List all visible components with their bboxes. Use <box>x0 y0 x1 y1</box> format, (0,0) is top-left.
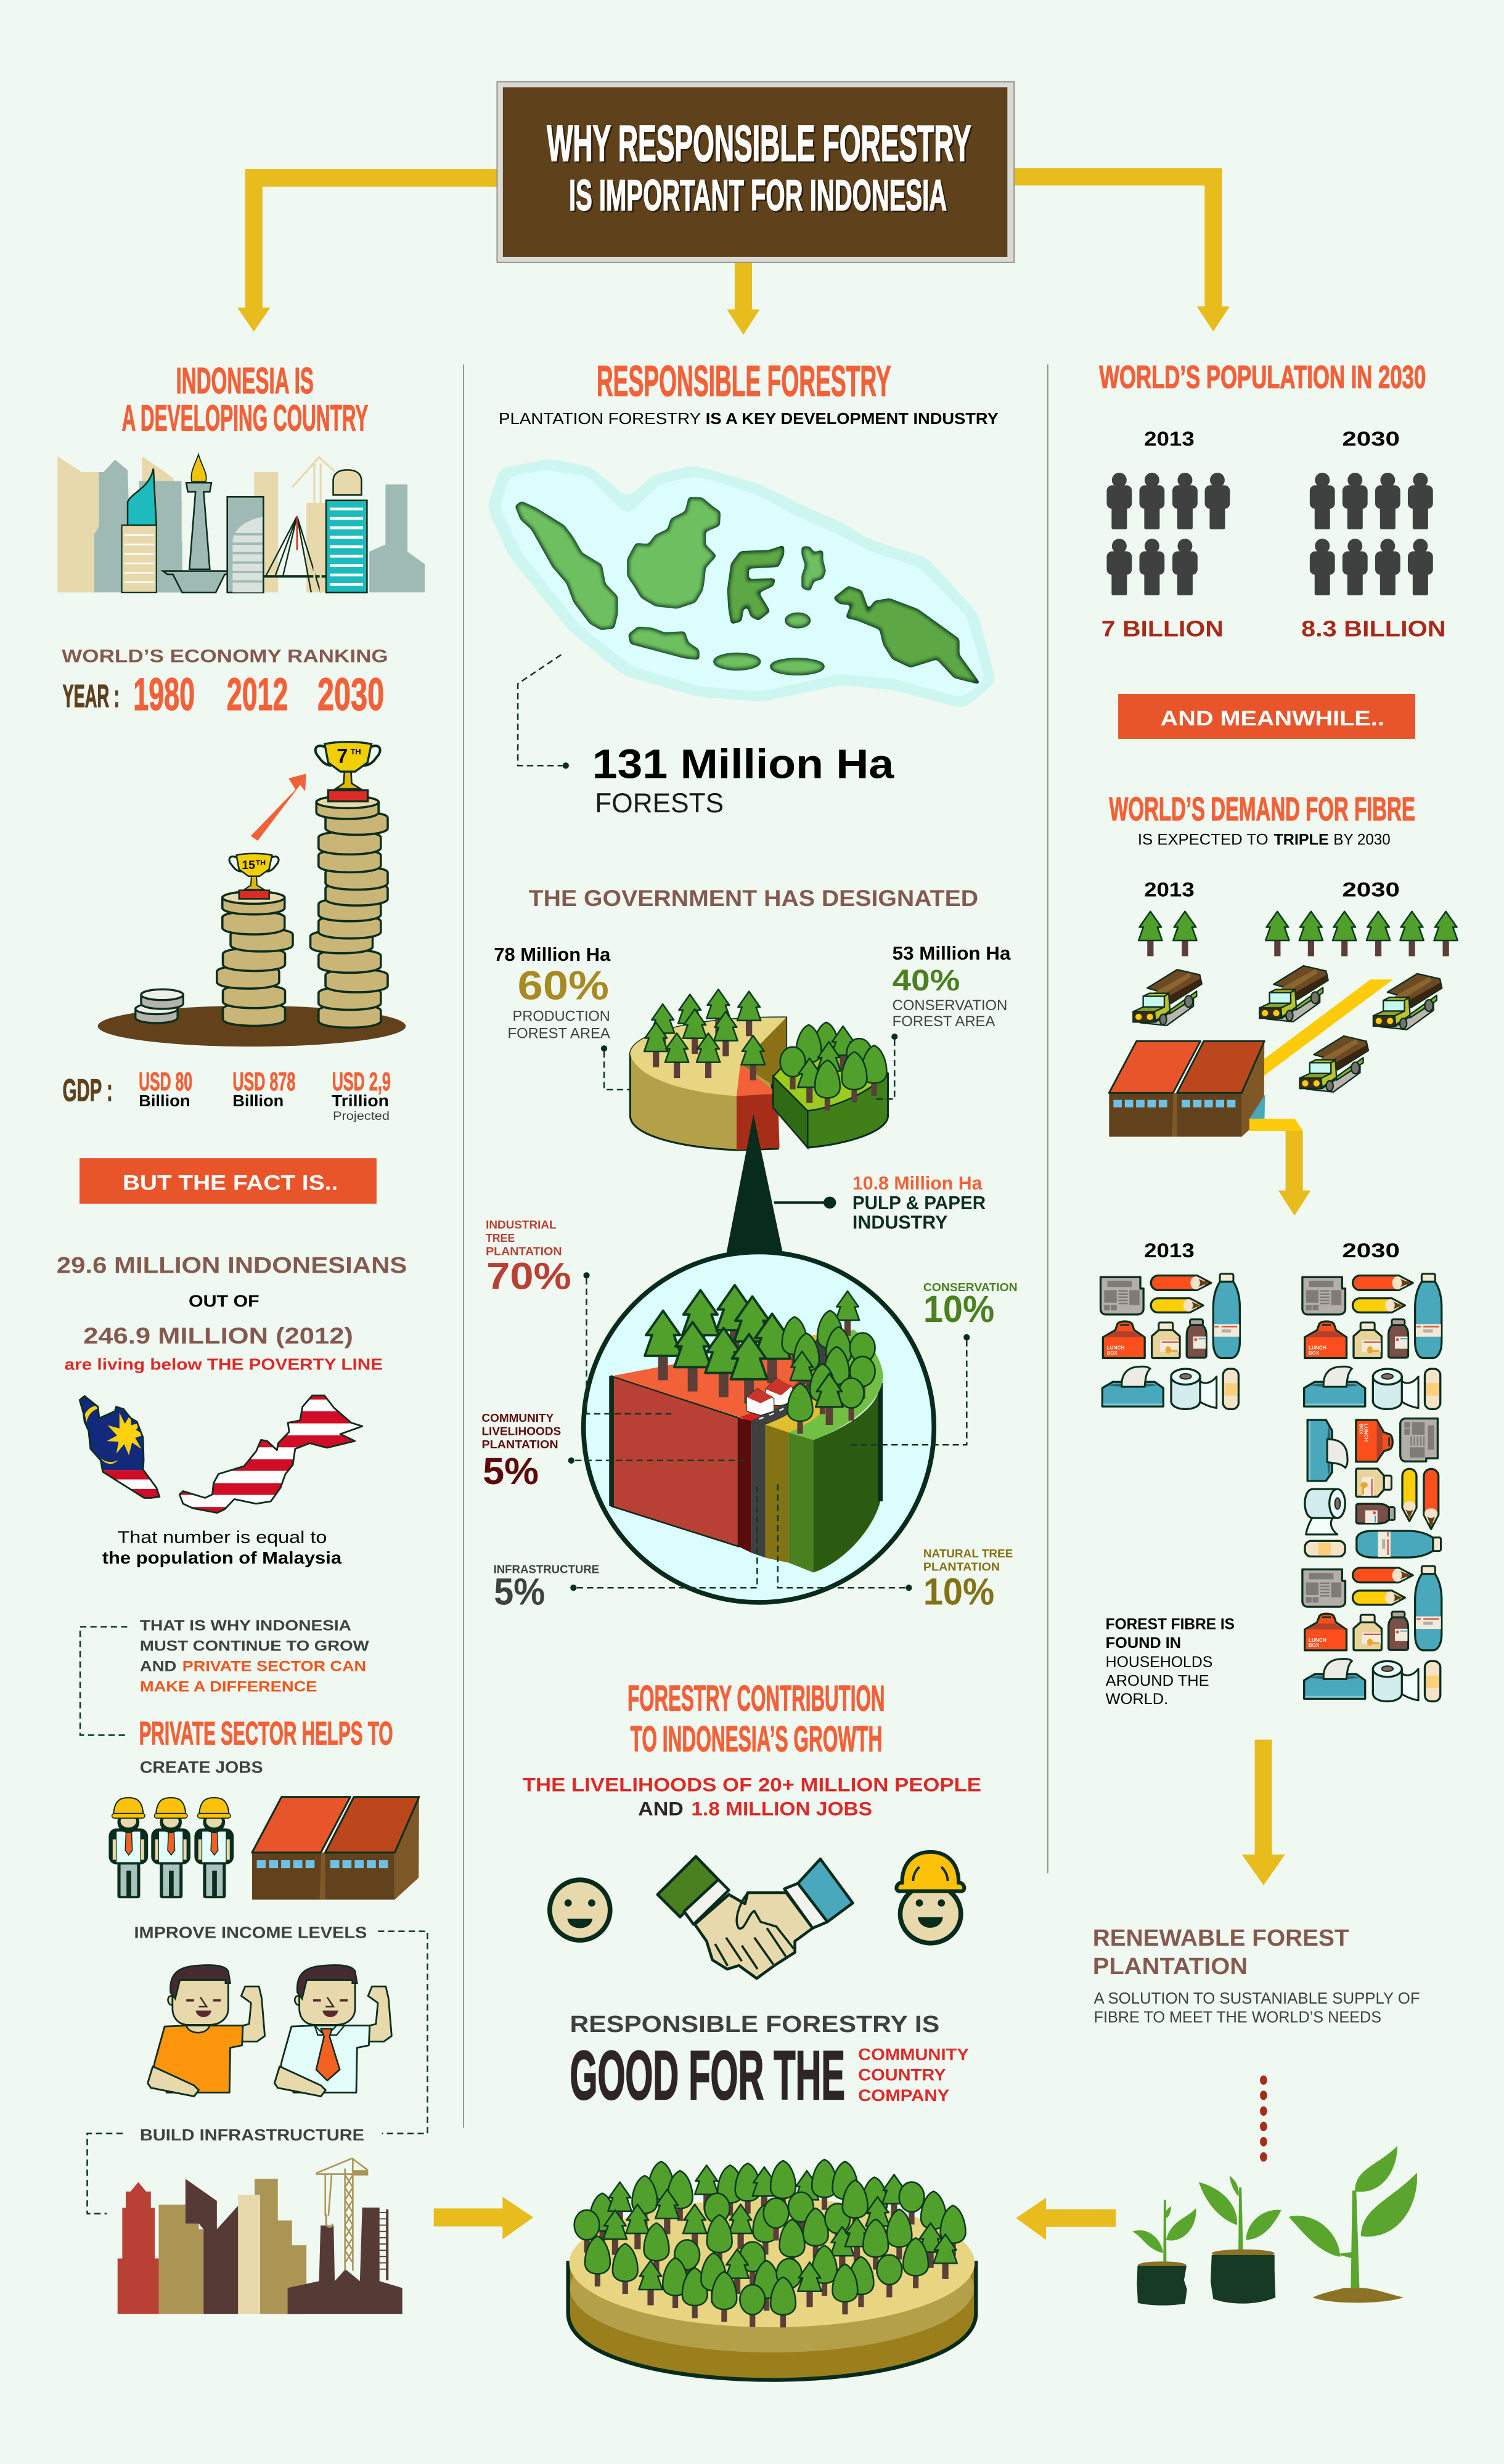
text: livelihoods and jobs: 1.8 MILLION JOBS <box>691 1797 872 1819</box>
label: build infrastructure: BUILD INFRASTRUCTURE <box>140 2127 364 2144</box>
slogan: responsible forestry is good for the: GOOD FOR THE <box>570 2036 845 2114</box>
stat: infrastructure 5%: 5% <box>494 1570 545 1612</box>
icon: 7th trophy <box>316 742 380 801</box>
years row: 1980 <box>133 669 195 720</box>
stat: infrastructure 5% <box>494 1562 599 1612</box>
heading: World's economy ranking: WORLD’S ECONOMY RANKING <box>62 647 388 667</box>
stat: community livelihoods plantation 5%: 5% <box>483 1450 539 1492</box>
stat: production forest 60%: 60% <box>518 963 609 1009</box>
label: 2013: 2013 <box>1144 879 1195 901</box>
icon: community face <box>550 1880 610 1940</box>
dashed connector: production <box>601 1045 644 1090</box>
stat: 131 million ha forests: FORESTS <box>595 788 724 818</box>
icon: 15th trophy: 15 <box>242 859 255 872</box>
arrow: title to right column <box>1014 168 1230 332</box>
icon: workers <box>108 1798 234 1898</box>
stat: conservation forest 40% <box>893 944 1011 1030</box>
illustration: young tree <box>1289 2146 1417 2303</box>
arrow: from seedlings to forest <box>1016 2198 1116 2240</box>
icon: 7th trophy: 7 <box>337 745 348 768</box>
chart: 3D plantation block <box>611 1285 883 1573</box>
pictogram: 8.3 billion people <box>1310 473 1433 595</box>
poverty statistics: are living below THE POVERTY LINE <box>65 1355 383 1374</box>
dashed connector <box>378 1932 428 2134</box>
icon: factory <box>252 1797 419 1899</box>
icon: logging trucks <box>1133 966 1442 1092</box>
slogan: responsible forestry is good for the: RESPONSIBLE FORESTRY IS <box>570 2011 939 2038</box>
label: create jobs: CREATE JOBS <box>140 1758 263 1777</box>
GDP row: Trillion <box>332 1093 389 1110</box>
yellow road <box>1263 979 1393 1077</box>
title line 1 shadow: WHY RESPONSIBLE FORESTRY <box>549 116 973 174</box>
stat: 131 million ha forests <box>592 741 894 818</box>
slogan: responsible forestry is good for the: COMPANY <box>858 2086 949 2105</box>
islands <box>516 498 979 683</box>
text: why Indonesia must grow: THAT IS WHY INDONESIA <box>140 1618 351 1634</box>
text: why Indonesia must grow <box>140 1618 369 1695</box>
forest trees <box>574 2160 965 2327</box>
plantation pines <box>645 1285 790 1403</box>
houses <box>746 1378 793 1416</box>
heading: forestry contribution <box>627 1679 885 1759</box>
text: a solution to sustainable supply: A SOLUTION TO SUSTANIABLE SUPPLY OF <box>1094 1990 1420 2007</box>
title box <box>497 82 1014 263</box>
years row: 2030 <box>317 669 384 720</box>
arrow: down to renewable plantation <box>1242 1740 1285 1885</box>
dashed connector: conservation <box>872 1034 897 1099</box>
icon: handshake <box>658 1856 852 1978</box>
stat: industrial tree plantation 70% <box>486 1218 571 1297</box>
dashed connector <box>88 2134 123 2214</box>
arrow: factory to products <box>1249 1119 1310 1215</box>
arrow: title to centre column <box>727 261 759 335</box>
pictogram: 7 billion people <box>1106 473 1230 595</box>
banner: and meanwhile: AND MEANWHILE.. <box>1161 707 1384 730</box>
text: forest fibre found in households: AROUND THE <box>1106 1672 1209 1689</box>
GDP row: USD 878 <box>232 1067 295 1096</box>
sea halo <box>487 459 996 709</box>
stat: natural tree plantation 10%: PLANTATION <box>923 1560 1000 1573</box>
products 2030 rotated middle <box>1305 1419 1441 1557</box>
banner: and meanwhile <box>1118 694 1415 739</box>
stat: industrial tree plantation 70%: PLANTATION <box>486 1245 562 1258</box>
label: 2013: 2013 <box>1144 428 1195 450</box>
pulp and paper slice <box>737 1064 778 1096</box>
stat: production forest 60%: FOREST AREA <box>508 1025 610 1042</box>
stat: conservation forest 40%: 53 Million Ha <box>893 944 1011 964</box>
magnifier circle <box>584 1252 934 1602</box>
production slice <box>630 1018 787 1150</box>
illustration: forest disc <box>568 2160 976 2380</box>
illustration: seedling medium <box>1199 2176 1281 2304</box>
banner: but the fact is: BUT THE FACT IS.. <box>123 1172 338 1195</box>
text: forest fibre found in households: HOUSEHOLDS <box>1106 1654 1212 1671</box>
map: Indonesia <box>487 459 996 709</box>
text: why Indonesia must grow: MAKE A DIFFERENCE <box>140 1678 317 1695</box>
icon: Jakarta skyline <box>57 454 425 592</box>
block top layers <box>789 1329 883 1440</box>
heading: Indonesia is a developing country <box>122 360 368 439</box>
subheading: expected to triple: IS EXPECTED TO <box>1138 831 1269 848</box>
stat: natural tree plantation 10%: 10% <box>923 1570 994 1612</box>
stat: industrial tree plantation 70%: TREE <box>486 1231 515 1244</box>
slogan: responsible forestry is good for the: COUNTRY <box>858 2066 946 2084</box>
banner: but the fact is <box>80 1158 377 1204</box>
heading: forestry contribution: FORESTRY CONTRIBUTION <box>627 1679 885 1719</box>
pines on production <box>644 989 765 1080</box>
label: 2030: 2030 <box>1342 879 1400 901</box>
column divider right <box>1047 365 1048 1873</box>
icon row: 2013 trees <box>1138 912 1197 957</box>
subheading: expected to triple: BY 2030 <box>1333 831 1391 848</box>
GDP row: Projected <box>333 1109 390 1123</box>
stat: production forest 60%: PRODUCTION <box>513 1008 610 1024</box>
GDP row: USD 2,9 <box>332 1067 391 1096</box>
text: a solution to sustainable supply: FIBRE TO MEET THE WORLD’S NEEDS <box>1094 2009 1381 2026</box>
dashed connector and dot <box>518 655 569 769</box>
text: livelihoods and jobs: THE LIVELIHOODS OF 20+ MILLION PEOPLE <box>523 1773 981 1795</box>
callout: pulp and paper: 10.8 Million Ha <box>852 1173 983 1194</box>
arrow: title to left column <box>237 169 497 332</box>
dashed connectors in block <box>568 1278 970 1591</box>
poverty statistics: OUT OF <box>189 1292 260 1310</box>
slogan: responsible forestry is good for the <box>570 2011 969 2114</box>
icon: paper factory <box>1109 1041 1265 1136</box>
heading: the government has designated: THE GOVERNMENT HAS DESIGNATED <box>529 885 978 911</box>
block walls <box>611 1376 738 1546</box>
stat: conservation forest 40%: FOREST AREA <box>893 1013 995 1030</box>
poverty statistics: 246.9 MILLION (2012) <box>83 1323 353 1348</box>
heading: forestry contribution: TO INDONESIA’S GROWTH <box>631 1719 882 1759</box>
icon: city skyline with crane <box>118 2158 403 2314</box>
label: improve income levels: IMPROVE INCOME LEVELS <box>134 1924 367 1941</box>
map: east Malaysia flag <box>179 1394 364 1514</box>
stat: conservation 10%: 10% <box>923 1288 994 1330</box>
stat: production forest 60% <box>494 945 611 1042</box>
subheading: plantation forestry <box>499 410 999 428</box>
stat: infrastructure 5%: INFRASTRUCTURE <box>494 1562 599 1575</box>
text: why Indonesia must grow: AND <box>140 1658 176 1675</box>
GDP row: Billion <box>232 1093 284 1110</box>
coin stack 2012 <box>217 891 293 1026</box>
stat: industrial tree plantation 70%: 70% <box>486 1255 571 1297</box>
arrow: growth <box>251 773 306 841</box>
title line 2: IS IMPORTANT FOR INDONESIA <box>569 171 947 220</box>
caption: population of Malaysia: That number is equal to <box>117 1527 327 1546</box>
text: a solution to sustainable supply <box>1094 1990 1420 2026</box>
heading: Indonesia is a developing country: INDONESIA IS <box>176 360 314 401</box>
icon: 7th trophy: TH <box>351 747 361 756</box>
stat: conservation forest 40%: 40% <box>893 964 960 997</box>
text: livelihoods and jobs <box>523 1773 981 1819</box>
title line 1: WHY RESPONSIBLE FORESTRY <box>547 115 971 172</box>
years row <box>62 669 384 720</box>
text: livelihoods and jobs: AND <box>638 1797 684 1819</box>
caption: population of Malaysia <box>102 1527 341 1567</box>
subheading: expected to triple <box>1138 831 1391 848</box>
subheading: plantation forestry: IS A KEY DEVELOPMENT INDUSTRY <box>706 410 999 428</box>
icon: 15th trophy: TH <box>256 859 266 867</box>
stat: conservation forest 40%: CONSERVATION <box>893 997 1007 1014</box>
poverty statistics: 29.6 MILLION INDONESIANS <box>57 1252 407 1278</box>
dashed connector: industrial tree plantation <box>583 1272 590 1278</box>
icon: manager with tie <box>274 1965 391 2096</box>
stat: natural tree plantation 10%: NATURAL TREE <box>923 1547 1013 1560</box>
stat: 8.3 billion: 8.3 BILLION <box>1301 616 1446 642</box>
stat: 131 million ha forests: 131 Million Ha <box>592 741 894 787</box>
stat: community livelihoods plantation 5%: COMMUNITY <box>481 1411 554 1424</box>
icon: worker in orange shirt <box>148 1965 265 2096</box>
heading: private sector helps to: PRIVATE SECTOR HELPS TO <box>139 1716 393 1752</box>
stat: conservation 10%: CONSERVATION <box>923 1281 1018 1294</box>
GDP row: USD 80 <box>139 1067 192 1096</box>
arrow: to forest disc <box>434 2197 533 2239</box>
callout: pulp and paper <box>727 1114 986 1252</box>
label: 2013: 2013 <box>1144 1239 1195 1262</box>
stat: conservation 10% <box>923 1281 1018 1330</box>
icon: worker face with helmet <box>896 1852 964 1943</box>
caption: population of Malaysia: the population of Malaysia <box>102 1548 341 1567</box>
title line 2 shadow: IS IMPORTANT FOR INDONESIA <box>571 173 949 222</box>
coin stack 2030 <box>311 796 388 1027</box>
years row: 2012 <box>227 669 288 720</box>
silver coins 1980 <box>136 989 183 1023</box>
heading: responsible forestry: RESPONSIBLE FORESTRY <box>597 357 891 406</box>
text: forest fibre found in households: FOREST FIBRE IS <box>1106 1615 1235 1633</box>
products 2030 top <box>1302 1274 1442 1409</box>
text: forest fibre found in households: FOUND IN <box>1106 1634 1181 1652</box>
chart: 3D forest pie <box>630 989 888 1150</box>
label: 2030: 2030 <box>1342 1239 1400 1262</box>
products 2013 <box>1101 1274 1240 1409</box>
stat: community livelihoods plantation 5%: LIVELIHOODS <box>481 1424 561 1437</box>
subheading: expected to triple: TRIPLE <box>1273 831 1329 848</box>
heading: Indonesia is a developing country: A DEVELOPING COUNTRY <box>122 398 368 439</box>
stat: community livelihoods plantation 5% <box>481 1411 561 1492</box>
heading: renewable forest plantation: RENEWABLE FOREST <box>1093 1925 1349 1951</box>
illustration: seedling small <box>1132 2200 1196 2306</box>
chart: coin stacks and trophies <box>98 742 406 1046</box>
slogan: responsible forestry is good for the: COMMUNITY <box>858 2045 969 2063</box>
map: peninsular Malaysia flag <box>79 1395 160 1499</box>
callout: pulp and paper: PULP & PAPER <box>852 1193 986 1214</box>
heading: renewable forest plantation <box>1093 1925 1349 1980</box>
conservation trees <box>782 1291 875 1421</box>
text: forest fibre found in households: WORLD. <box>1106 1691 1168 1708</box>
text: forest fibre found in households <box>1106 1615 1235 1708</box>
text: why Indonesia must grow: PRIVATE SECTOR CAN <box>182 1658 366 1675</box>
dashed connector <box>80 1626 128 1735</box>
disc layers <box>568 2263 976 2380</box>
GDP row: GDP : <box>62 1072 113 1108</box>
text: why Indonesia must grow: MUST CONTINUE TO GROW <box>140 1638 369 1655</box>
stat: natural tree plantation 10% <box>923 1547 1013 1612</box>
years row: YEAR : <box>62 679 120 714</box>
label: 2030: 2030 <box>1342 428 1400 450</box>
subheading: plantation forestry: PLANTATION FORESTRY <box>499 410 701 428</box>
products 2030 bottom <box>1302 1566 1442 1702</box>
poverty statistics <box>57 1252 407 1374</box>
icon: 15th trophy <box>229 854 279 899</box>
trees on conservation <box>780 1022 887 1111</box>
stat: community livelihoods plantation 5%: PLANTATION <box>481 1438 558 1451</box>
GDP row: Billion <box>139 1093 190 1110</box>
callout: pulp and paper: INDUSTRY <box>852 1213 947 1233</box>
icon row: 2030 trees <box>1265 912 1458 957</box>
column divider left <box>463 365 464 2127</box>
GDP row <box>62 1067 391 1123</box>
ground shadow <box>98 1006 406 1046</box>
stat: production forest 60%: 78 Million Ha <box>494 945 611 965</box>
dotted red line <box>1260 2075 1267 2161</box>
stat: industrial tree plantation 70%: INDUSTRIAL <box>486 1218 557 1231</box>
stat: 7 billion: 7 BILLION <box>1101 616 1224 642</box>
heading: renewable forest plantation: PLANTATION <box>1093 1953 1248 1980</box>
conservation slice <box>773 1074 888 1148</box>
